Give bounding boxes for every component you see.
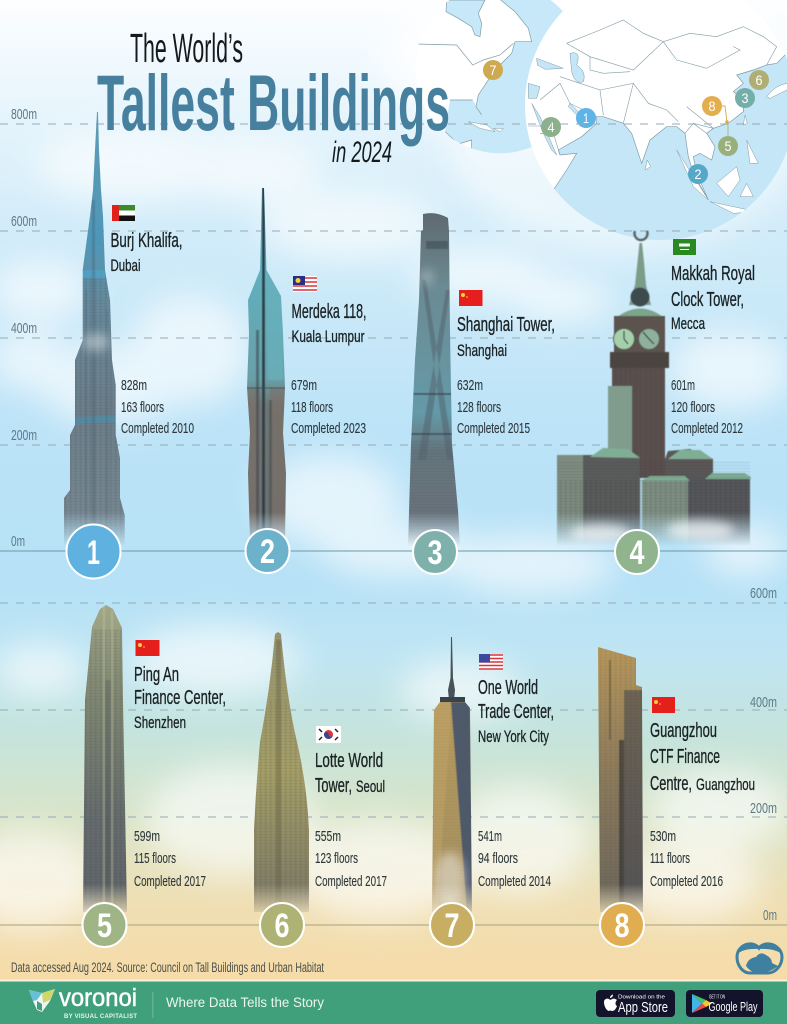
- source note: Data accessed Aug 2024. Source: Council on Tall Buildings and Urban Habitat: [11, 960, 324, 975]
- rank badge 5: 5: [97, 907, 112, 945]
- info: Burj Khalifa: Dubai: [110, 257, 140, 275]
- rank badge 8: 8: [614, 907, 630, 945]
- rank badge 7: [430, 903, 474, 947]
- map pin 8: 8: [708, 98, 716, 114]
- info: Ping An Finance Center: Finance Center,: [134, 687, 226, 709]
- rank badge 1: [66, 524, 120, 578]
- flag: UAE: [112, 205, 135, 221]
- map: Asia disc: [500, 0, 787, 241]
- info: One World Trade Center: Trade Center,: [478, 701, 554, 723]
- info: One World Trade Center: [478, 654, 554, 890]
- info: Burj Khalifa: 163 floors: [121, 399, 164, 416]
- rank badge 2: [246, 529, 290, 573]
- map pin 4: [541, 117, 561, 137]
- info: Merdeka 118: Merdeka 118,: [292, 301, 366, 323]
- info: Shanghai Tower: [457, 290, 555, 437]
- heading line: in 2024: in 2024: [332, 136, 392, 169]
- flag: USA: [479, 654, 503, 670]
- info: Lotte World Tower: Lotte World: [315, 750, 383, 772]
- logo byline: BY VISUAL CAPITALIST: [64, 1014, 137, 1020]
- map pin 5: 5: [724, 138, 732, 154]
- map pin 2: 2: [694, 166, 702, 182]
- axis labels: lower chart: 400m: [750, 694, 777, 711]
- info: Shanghai Tower: Shanghai: [457, 342, 507, 360]
- map pin 4: 4: [548, 119, 555, 135]
- building: Ping An Finance Center: [83, 605, 127, 912]
- info: Guangzhou CTF Finance Centre: Centre,: [650, 773, 692, 795]
- flag: China: [652, 697, 675, 713]
- info: One World Trade Center: 541m: [478, 828, 502, 845]
- building: Merdeka 118: [247, 188, 286, 536]
- logo wordmark: voronoi: [59, 984, 137, 1012]
- info: Makkah Royal Clock Tower: 120 floors: [671, 399, 715, 416]
- info: Shanghai Tower: Shanghai Tower,: [457, 314, 555, 336]
- info: One World Trade Center: New York City: [478, 728, 550, 746]
- info: One World Trade Center: Completed 2014: [478, 873, 551, 890]
- info: Shanghai Tower: Completed 2015: [457, 420, 530, 437]
- info: Ping An Finance Center: [134, 640, 226, 890]
- axis labels: lower chart: 200m: [750, 800, 777, 817]
- info: Merdeka 118: Kuala Lumpur: [292, 328, 365, 346]
- building: Lotte World Tower: [254, 632, 309, 912]
- axis labels: upper chart: 600m: [11, 213, 37, 230]
- axis labels: upper chart: 800m: [11, 106, 37, 123]
- info: Merdeka 118: 679m: [291, 377, 317, 394]
- axis labels: upper chart: 200m: [11, 427, 37, 444]
- axis labels: lower chart: [750, 585, 777, 924]
- info: Ping An Finance Center: 115 floors: [134, 850, 176, 867]
- flag: Saudi Arabia: [673, 239, 696, 255]
- building: Burj Khalifa: [64, 112, 125, 544]
- rank badge 2: 2: [260, 533, 275, 571]
- antenna: [448, 637, 455, 700]
- axis labels: upper chart: 400m: [11, 320, 37, 337]
- rank badge 6: 6: [274, 907, 290, 945]
- info: Guangzhou CTF Finance Centre: Completed 2016: [650, 873, 723, 890]
- info: Guangzhou CTF Finance Centre: 111 floors: [650, 850, 690, 867]
- info: Shanghai Tower: 128 floors: [457, 399, 501, 416]
- building: One World Trade Center: [432, 637, 472, 912]
- info: Makkah Royal Clock Tower: Mecca: [671, 315, 706, 333]
- building: Shanghai Tower: [408, 213, 460, 544]
- info: Guangzhou CTF Finance Centre: Guangzhou: [696, 776, 755, 794]
- app store badge: App Store: [618, 1000, 668, 1016]
- flag: China: [136, 640, 160, 656]
- flag: Malaysia: [293, 276, 317, 292]
- info: Guangzhou CTF Finance Centre: 530m: [650, 828, 676, 845]
- map pin 2: [688, 164, 708, 184]
- info: Burj Khalifa: Completed 2010: [121, 420, 194, 437]
- info: Guangzhou CTF Finance Centre: Guangzhou: [650, 720, 717, 742]
- info: Burj Khalifa: Burj Khalifa,: [110, 230, 182, 252]
- info: Makkah Royal Clock Tower: Completed 2012: [671, 420, 743, 437]
- info: Ping An Finance Center: Completed 2017: [134, 873, 206, 890]
- info: One World Trade Center: 94 floors: [478, 850, 518, 867]
- icon: cloud globe mark: [737, 944, 782, 973]
- axis labels: upper chart: [11, 106, 37, 550]
- heading line: The World's: The World’s: [130, 25, 243, 71]
- info: Makkah Royal Clock Tower: 601m: [671, 377, 695, 394]
- axis labels: upper chart: 0m: [11, 533, 25, 550]
- map pin 3: [735, 88, 755, 108]
- rank badge 3: 3: [428, 534, 442, 572]
- map pin 6: [749, 70, 769, 90]
- map pin 8: [702, 96, 722, 116]
- info: Ping An Finance Center: 599m: [134, 828, 160, 845]
- rank badge 3: [413, 530, 457, 574]
- info: Lotte World Tower: Completed 2017: [315, 873, 387, 890]
- info: Lotte World Tower: Tower,: [315, 775, 352, 797]
- info: Merdeka 118: 118 floors: [291, 399, 333, 416]
- tagline: Where Data Tells the Story: [166, 995, 324, 1010]
- map pin 7: 7: [490, 62, 497, 78]
- world map inset with building location pins: [380, 0, 787, 255]
- info: Shanghai Tower: 632m: [457, 377, 483, 394]
- rank badge 4: [615, 530, 659, 574]
- google play badge: GET IT ON: [709, 994, 725, 1000]
- building: Makkah Royal Clock Tower: [557, 231, 752, 548]
- info: Ping An Finance Center: Ping An: [134, 664, 179, 686]
- info: Merdeka 118: Completed 2023: [291, 420, 366, 437]
- flag: South Korea: [316, 726, 341, 743]
- rank badge 5: [82, 903, 126, 947]
- crescent: [634, 231, 648, 240]
- app store badge: [596, 990, 675, 1017]
- map pin 1: 1: [583, 110, 589, 126]
- info: Lotte World Tower: 123 floors: [315, 850, 358, 867]
- info: Merdeka 118: [291, 276, 366, 437]
- rank badge 4: 4: [630, 534, 645, 572]
- axis labels: lower chart: 0m: [763, 907, 777, 924]
- map pin 7: [483, 60, 503, 80]
- flag: China: [459, 290, 482, 306]
- info: Guangzhou CTF Finance Centre: [650, 697, 755, 890]
- google play badge: Google Play: [708, 999, 758, 1014]
- footer band: [0, 980, 787, 1024]
- info: Ping An Finance Center: Shenzhen: [134, 714, 186, 732]
- map leader lines: [720, 106, 729, 140]
- rank badge 6: [260, 903, 304, 947]
- info: Makkah Royal Clock Tower: [671, 239, 755, 437]
- info: Lotte World Tower: [315, 726, 387, 890]
- app store badge: Download on the: [618, 994, 665, 1000]
- google play badge: [686, 990, 763, 1017]
- info: Lotte World Tower: Seoul: [356, 778, 385, 796]
- info: Burj Khalifa: [110, 205, 194, 437]
- map: North America disc: [418, 0, 563, 154]
- building: Guangzhou CTF Finance Centre: [598, 647, 643, 912]
- info: Guangzhou CTF Finance Centre: CTF Finance: [650, 746, 720, 768]
- rank badge 7: 7: [444, 907, 460, 945]
- map pin 3: 3: [742, 90, 749, 106]
- background clouds: [0, 129, 787, 930]
- map pin 5: [718, 136, 738, 156]
- rank badge 8: [600, 903, 644, 947]
- info: Burj Khalifa: 828m: [121, 377, 147, 394]
- info: One World Trade Center: One World: [478, 677, 538, 699]
- title: [97, 25, 450, 169]
- logo icon: [29, 989, 55, 1012]
- map pin 6: 6: [756, 72, 763, 88]
- axis labels: lower chart: 600m: [750, 585, 777, 602]
- info: Lotte World Tower: 555m: [315, 828, 341, 845]
- map pin 1: [576, 108, 596, 128]
- info: Makkah Royal Clock Tower: Clock Tower,: [671, 289, 744, 311]
- rank badge 1: 1: [87, 534, 100, 572]
- heading line: Tallest Buildings: Tallest Buildings: [97, 58, 450, 147]
